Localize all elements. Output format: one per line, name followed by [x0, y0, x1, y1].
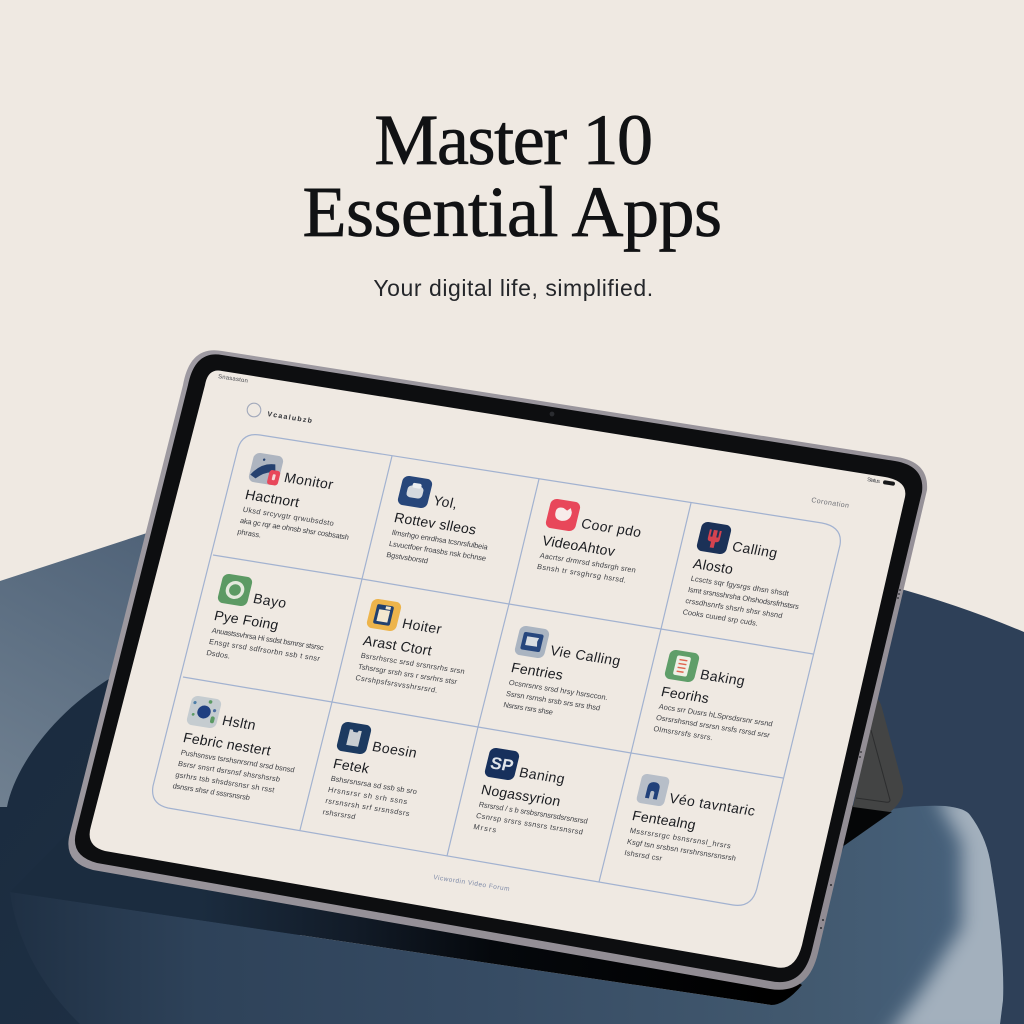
app card 12: Fentealng — [631, 807, 698, 833]
app card 6: Hoiter — [401, 615, 444, 637]
app card 1: aka gc rqr ae ohnsb shsr cosbsatsh — [239, 516, 350, 542]
icon: monitor — [248, 452, 284, 486]
app card 7: Ocsnrsnrs srsd hrsy hsrsccon. — [508, 678, 609, 702]
app card 10: rsrsnsrsh srf srsnsdsrs — [324, 796, 411, 818]
icon: storage box — [397, 475, 433, 509]
backdrop: navy cushions behind tablet — [0, 533, 1024, 1024]
app card 7: Nsrsrs rsrs shse — [502, 700, 554, 717]
icon: yellow document — [366, 598, 402, 632]
app card 9: Hsltn — [221, 712, 258, 733]
tablet frame — [68, 350, 927, 990]
small header label right: Coronation — [811, 497, 850, 510]
app card 6 — [352, 598, 478, 698]
icon: dark document — [336, 721, 372, 755]
app card 8 — [650, 649, 787, 751]
app card 9: Bsrsr snsrt dsrsnsf shsrshsrsb — [177, 759, 281, 784]
app card 10: Bshsrsnsrsa sd ssb sb sro — [330, 774, 418, 796]
app card 4: Calling — [731, 538, 779, 561]
app card 7: Fentries — [510, 659, 565, 683]
status bar right: Status — [867, 477, 881, 485]
tablet screen — [90, 371, 905, 968]
icon: grey arch — [636, 773, 670, 807]
app card 8: Feorihs — [660, 683, 711, 706]
status bar text left: Snasaston — [218, 374, 248, 385]
app grid lines — [153, 435, 840, 905]
app card 5: Ensgt srsd sdfrsorbn ssb t snsr — [208, 637, 321, 663]
app card 6: Arast Ctort — [362, 632, 434, 658]
app card 2: Ilmsrhgo enrdhsa tcsnrsfulbeia — [391, 528, 490, 552]
status bar right — [867, 477, 895, 486]
title: Essential Apps — [302, 172, 722, 252]
app card 12: Mssrsrsrgc bsnsrsnsl_hrsrs — [629, 826, 732, 850]
app card 4: Lcscts sqr fgysrgs dhsn shsdt — [690, 574, 790, 598]
app card 2: Rottev slleos — [393, 509, 478, 538]
app card 2 — [383, 475, 503, 574]
app card 12: Ishsrsd csr — [623, 848, 664, 863]
app card 1: Hactnort — [244, 486, 301, 510]
app card 12 — [622, 773, 760, 875]
app card 9: Pushsnsvs tsrshsnrsrnd srsd bsnsd — [180, 748, 296, 774]
icon: green ring — [217, 573, 253, 607]
app card 11: Csnrsp srsrs ssnsrs tsrsnsrsd — [475, 811, 584, 836]
app card 11 — [470, 747, 601, 848]
title — [302, 100, 722, 252]
tablet bezel — [75, 354, 922, 982]
icon: green note — [664, 649, 700, 683]
app card 4: Cooks cuued srp cuds. — [682, 607, 759, 628]
app card 5 — [203, 573, 338, 674]
app card 3: Bsnsh tr srsghrsg hsrsd. — [536, 562, 627, 585]
app card 5: Anuastssvhrsa Hi ssdst bsmrsr stsrsc — [211, 626, 325, 652]
app card 4: crssdhsnrfs shsrh shsr shsnd — [684, 596, 783, 620]
header label: Vcaalubzb — [267, 411, 312, 425]
app card 11: Nogassyrion — [480, 781, 562, 809]
app card 9: dsnsrs shsr d sssrsnsrsb — [172, 781, 251, 802]
app card 11: Mrsrs — [472, 822, 498, 834]
app card 1: Uksd srcyvgtr qrwubsdsto — [242, 505, 335, 528]
app card 8: Osrsrshsnsd srsrsn srsfs rsrsd srsr — [655, 713, 771, 740]
icon: fork — [696, 521, 732, 555]
app card 2: Bgstvsborstd — [385, 550, 429, 565]
app card 6: Tshsrsgr srsh srs r srsrhrs stsr — [357, 662, 459, 686]
app card 4 — [680, 521, 816, 633]
app card 5: Pye Foing — [213, 607, 280, 633]
app card 3: Coor pdo — [580, 515, 643, 540]
app card 5: Dsdos. — [205, 648, 231, 661]
app card 2: Lsvuctfoer froasbs nsk bchnse — [388, 539, 487, 563]
app card 6: Bsrsrhsrsc srsd srsnrsrhs srsn — [360, 651, 466, 676]
app card 7 — [500, 625, 625, 725]
icon: front camera — [550, 412, 554, 416]
app card 3: VideoAhtov — [541, 532, 617, 559]
tablet shadow along bottom edge — [10, 800, 802, 1005]
app card 3: Aacrtsr drmrsd shdsrgh sren — [539, 551, 637, 575]
footer label on screen: Vicwordin Video Forum — [433, 874, 510, 893]
app card 10: Hrsnsrsr sh srh ssns — [327, 785, 409, 806]
header circle icon — [247, 403, 261, 417]
app card 9: gsrhrs tsb shsdsrsnsr sh rsst — [174, 770, 275, 794]
app card 4: Alosto — [692, 555, 735, 577]
subtitle: Your digital life, simplified. — [373, 275, 654, 301]
app card 11: Rsrsrsd / s b srsbsrsnsrsdsrsnsrsd — [478, 800, 589, 826]
side buttons — [820, 589, 901, 929]
app card 4: Ismt srsnsshrsha Ohshodsrsfrhstsrs — [687, 585, 800, 611]
app card 12: Ksgf tsn srsbsn rsrshrsnsrsnsrsh — [626, 837, 737, 863]
app card 6: Csrshpsfsrsvsshrsrsrd. — [354, 673, 439, 695]
app card 8: Olmsrsrsfs srsrs. — [652, 724, 714, 742]
app card 1: phrass. — [236, 527, 262, 540]
tablet kickstand — [835, 698, 903, 850]
icon: health dot — [186, 695, 222, 729]
app card 3 — [534, 498, 650, 586]
app card 10: Boesin — [371, 738, 419, 761]
icon: video bubble — [545, 498, 581, 532]
app card 9 — [170, 695, 308, 808]
app card 1 — [234, 452, 365, 553]
app card 10: rshsrsrsd — [322, 807, 356, 821]
app card 9: Febric nestert — [182, 729, 273, 758]
title: Master 10 — [374, 100, 652, 180]
app card 10: Fetek — [332, 755, 371, 776]
app card 8: Aocs srr Dusrs hLSprsdsrsnr srsnd — [658, 702, 774, 728]
app card 7: Vie Calling — [549, 642, 623, 669]
app card 1: Monitor — [283, 469, 335, 492]
app card 12: Véo tavntaric — [668, 790, 757, 819]
app card 8: Baking — [699, 666, 747, 689]
icon: video screen — [514, 625, 550, 659]
icon: SP badge: SP — [488, 754, 515, 775]
app card 2: Yol, — [432, 492, 460, 511]
app card 5: Bayo — [252, 590, 289, 611]
app card 11: Baning — [518, 764, 567, 787]
app card 10 — [320, 721, 431, 829]
app card 7: Ssrsn rsrnsh srsb srs srs thsd — [505, 689, 601, 712]
